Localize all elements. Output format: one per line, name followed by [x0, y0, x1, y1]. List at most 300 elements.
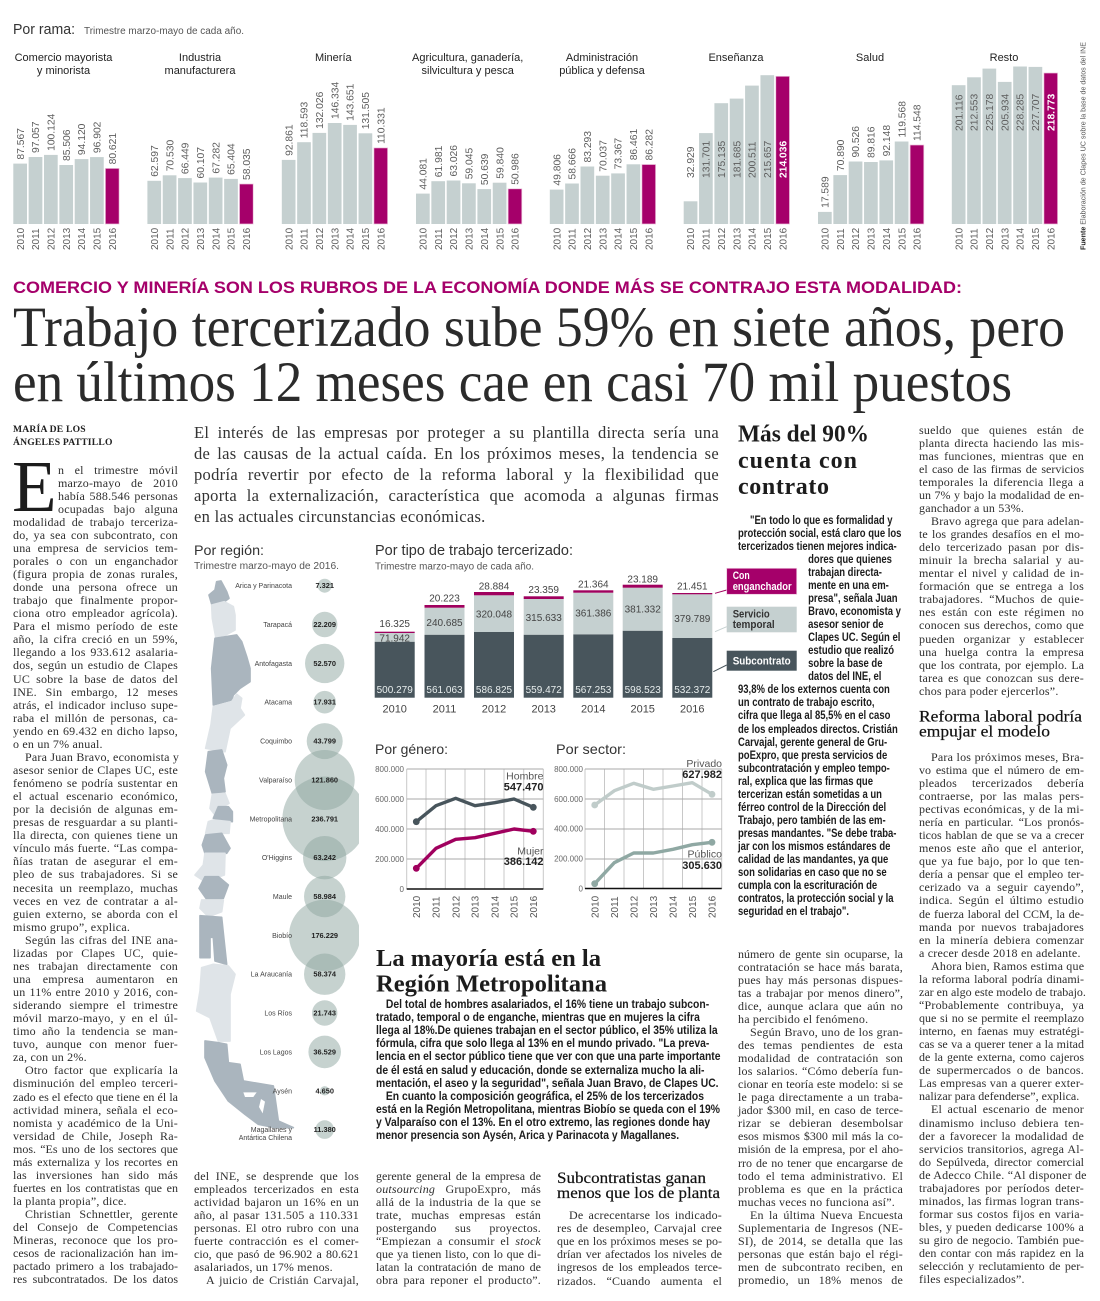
text: bold contract column: ral, explica que las firmas que [738, 776, 873, 788]
map: Chile by region [195, 581, 293, 1128]
bar chart: agricultura: 59.045 [465, 148, 476, 179]
text: column 1: lla directa, con quienes tiene un [13, 828, 178, 842]
text: column 1: pleo de sus trabajadores. Si se [13, 867, 178, 881]
text: column 6 bottom: en la minería debiera comenzar [919, 933, 1084, 947]
region labels and values: Los Lagos [260, 1049, 292, 1056]
text: column 6 bottom: manda por nuevos trabajadores [919, 920, 1084, 934]
text: bold contract column: Carvajal, gerente general de Gru- [738, 737, 887, 749]
stacked bar chart: tipo de trabajo: 598.523 [625, 685, 661, 696]
bar chart: industria manufacturera: 2012 [181, 227, 192, 250]
deck paragraph: aporta la externalización, característica que acomoda a algunas firmas [194, 486, 719, 504]
text: column 5: En la última Nueva Encuesta [750, 1208, 903, 1222]
text: column 6 bottom: de la gente externa, como cajeros [919, 1050, 1084, 1064]
bar chart: resto [952, 52, 1058, 250]
bar chart: industria manufacturera: 2010 [150, 227, 161, 250]
text: column 6 bottom: Ahora bien, Ramos estima que [931, 959, 1084, 973]
text: column 4: rizados. “Cuando aumenta el [557, 1274, 722, 1288]
bar chart: administración pública y defensa: pública y defensa [559, 65, 646, 77]
region labels and values: 58.374 [313, 970, 337, 979]
bar chart: administración pública y defensa: 2010 [552, 227, 563, 250]
region labels and values: Maule [273, 894, 292, 901]
heading: por tipo [375, 543, 573, 572]
text: column 1: Christian Schnettler, gerente [25, 1207, 178, 1221]
bar chart: industria manufacturera: 2011 [165, 228, 176, 250]
text: column 5: misión de la empresa, por el aho- [738, 1142, 903, 1156]
subheading: subcontratistas [557, 1170, 720, 1202]
heading: por tipo: Por tipo de trabajo tercerizado: [375, 543, 573, 559]
text: column 1: del Consejo de Competencias [13, 1220, 178, 1234]
legend: con enganchador: Con [733, 570, 750, 582]
bar chart: minería: 118.593 [300, 101, 311, 138]
text: column 6 bottom: a crecer desde 2018 en adelante. [919, 946, 1081, 960]
text: column 3: que ya tienen listo, con lo que di- [376, 1247, 541, 1261]
text: bold metropolitana lead: y Valparaíso con el 13%. En el otro extremo, las regiones donde hay [376, 1117, 710, 1129]
line chart: por género: 2014 [490, 895, 501, 918]
deck paragraph: de las causas de la actual caída. En los próximos meses, la tendencia se [194, 444, 719, 462]
heading: la mayoría está en la región metropolitana [376, 946, 607, 998]
text: column 6 bottom: Para los próximos meses, Bra- [931, 750, 1084, 764]
bar chart: comercio mayorista y minorista: y minorista [37, 65, 91, 77]
line chart: por género [375, 741, 544, 918]
bar chart: agricultura: Agricultura, ganadería, [412, 52, 523, 64]
text: column 3: trate, muchas empresas están [376, 1208, 541, 1222]
region labels and values: Magallanes y [251, 1127, 292, 1134]
bar chart: minería: 2014 [346, 227, 357, 250]
line chart: por sector: Privado [686, 758, 722, 770]
region labels and values: 7.321 [315, 581, 334, 590]
bar chart: enseñanza: 2014 [748, 227, 759, 250]
heading: la mayoría está en la región metropolitana: La mayoría está en la [376, 946, 601, 972]
bar chart: comercio mayorista y minorista: 2012 [47, 227, 58, 250]
stacked bar chart: tipo de trabajo: 567.253 [575, 685, 612, 696]
text: column 6 bottom: bles, y pueden dedicarse 100% a [919, 1220, 1084, 1234]
legend: con enganchador [715, 568, 797, 594]
text: column 1: móvil marzo-mayo, y en el úl- [13, 1011, 178, 1025]
region labels and values: 121.860 [311, 776, 338, 784]
text: bold metropolitana lead: lencia en el sector público tiene que ver con que una parte importante [376, 1051, 721, 1063]
line chart: por sector: 2010 [590, 895, 601, 918]
line chart: por sector: 2013 [649, 895, 660, 918]
bar chart: industria manufacturera: 60.107 [196, 147, 207, 178]
bar chart: minería: 2015 [361, 227, 372, 250]
text: column 1: asesor senior de Clapes UC, este [13, 763, 178, 777]
region labels and values: 43.799 [313, 737, 336, 746]
text: column 6 bottom: trabajadores por períodos deter- [919, 1181, 1084, 1195]
text: bold contract column: trabajan directa- [808, 567, 882, 579]
text: column 6 top: chos para poder ejercerlos”. [919, 684, 1059, 698]
text: column 3: “Empiezan a consumir el stock [376, 1234, 541, 1248]
stacked bar chart: tipo de trabajo: 379.789 [674, 614, 711, 625]
byline [13, 424, 113, 448]
text: bold contract column: protección social, está claro que los [738, 528, 901, 540]
bubbles: regional totals [282, 579, 367, 1139]
bar chart: comercio mayorista y minorista [13, 52, 119, 250]
region labels and values: Biobío [272, 933, 292, 940]
text: column 1: necesita un reemplazo, muchas [13, 880, 178, 894]
text: column 1: yendo en 69.432 en dicho lapso, [13, 724, 178, 738]
line chart: por sector: 2014 [669, 895, 680, 918]
region labels and values: 176.229 [311, 931, 338, 940]
deck paragraph: en las actuales circunstancias económicas. [194, 506, 486, 526]
line chart: por sector: 627.982 [682, 769, 722, 781]
text: column 5: SI), de 2014, se detalla que las [738, 1234, 903, 1248]
heading: por rama: Por rama: [13, 21, 75, 38]
text: bold contract column: seguridad en el trabajo". [738, 906, 849, 918]
subheading: reforma laboral: Reforma laboral podría [919, 708, 1082, 726]
text: column 1: nes trabajan directamente con [13, 959, 178, 973]
text: column 1: atrás, el indicador incluso supe- [13, 698, 178, 712]
text: bold metropolitana lead: llega al 18%.De quienes trabajan en el sector público, el 35% utiliza la [376, 1025, 718, 1037]
region labels and values: 4.650 [315, 1086, 334, 1095]
stacked bar chart: tipo de trabajo [375, 574, 712, 716]
bar chart: administración pública y defensa: 2014 [614, 227, 625, 250]
text: column 1: lizadas por Clapes UC, quie- [13, 946, 178, 960]
bar chart: salud: 17.589 [820, 176, 832, 208]
bar chart: comercio mayorista y minorista: 97.057 [31, 121, 42, 153]
heading: más del 90% [738, 422, 869, 500]
bar chart: minería: 2016 [376, 227, 387, 250]
text: column 5: dice, aunque aclara que aún no [738, 999, 903, 1013]
text: bold metropolitana lead: tratado, temporal o de enganche, mientras que en mujeres la cifra [376, 1012, 700, 1024]
text: column 1: marzo-mayo de 2010 [58, 476, 178, 490]
region labels and values: Metropolitana [250, 816, 292, 823]
bar chart: administración pública y defensa: 86.282 [644, 129, 655, 160]
byline: MARÍA DE LOS [13, 424, 86, 435]
heading: más del 90%: Más del 90% [738, 422, 869, 448]
subheading: reforma laboral [919, 708, 1082, 740]
text: column 2: cio, que pasó de 96.902 a 80.621 [194, 1247, 359, 1261]
text: column 5: esos mismos $300 mil más la co- [738, 1129, 903, 1143]
text: bold contract column: de los empleados directos. Cristián [738, 724, 898, 736]
bar chart: enseñanza: 2015 [763, 227, 774, 250]
legend: servicio temporal: Servicio [733, 608, 770, 620]
line chart: por sector: 305.630 [682, 860, 722, 872]
bar chart: agricultura [412, 52, 523, 250]
text: column 6 bottom: la reforma laboral podría dinami- [919, 972, 1084, 986]
region labels and values: 58.984 [313, 892, 337, 901]
text: column 4: De acrecentarse los indicado- [569, 1208, 722, 1222]
text: bold contract column: Trabajo, pero también de las em- [738, 815, 886, 827]
heading: por región [194, 542, 339, 572]
heading: más del 90%: cuenta con [738, 448, 857, 474]
bar chart: enseñanza: Enseñanza [708, 52, 764, 64]
text: column 6 top: ganchador a un 53%. [919, 501, 1024, 515]
bar chart: enseñanza: 131.701 [702, 141, 713, 178]
bar chart: administración pública y defensa [550, 52, 656, 250]
text: column 2: empleados tercerizados en esta [194, 1182, 359, 1196]
text: column 5: tas a trabajar por menos dinero”, [738, 986, 903, 1000]
bar chart: resto: 2010 [954, 227, 965, 250]
region labels and values [235, 581, 338, 1142]
stacked bar chart: tipo de trabajo: 2010 [382, 704, 407, 716]
text: column 6 bottom: selección y reclutamiento de per- [919, 1259, 1084, 1273]
line chart: por sector: 200.000 [554, 854, 584, 864]
stacked bar chart: tipo de trabajo: 21.451 [677, 581, 708, 592]
text: bold contract column [738, 514, 901, 918]
bar chart: industria manufacturera: 2013 [196, 227, 207, 250]
bar chart: enseñanza: 2010 [686, 227, 697, 250]
text: column 6 bottom: indica. Según el último estudio [919, 893, 1084, 907]
bar chart: industria manufacturera: 2014 [211, 227, 222, 250]
legend: subcontrato [713, 651, 797, 672]
bar chart: administración pública y defensa: 58.666 [568, 148, 579, 180]
text: column 1: o en un 7% anual. [13, 737, 103, 751]
line chart: por género: Hombre [506, 770, 544, 782]
text: bold contract column: Bravo, economista y [808, 606, 901, 618]
bar chart: comercio mayorista y minorista: Comercio mayorista [15, 52, 113, 64]
region labels and values: Antártica Chilena [239, 1135, 292, 1142]
stacked bar chart: tipo de trabajo: 71.942 [379, 633, 410, 644]
text: bold contract column: tercerizados tienen mejores indica- [738, 541, 897, 553]
bar chart: resto: 228.285 [1016, 94, 1027, 131]
text: column 5: jador $300 mil, en caso de terce- [738, 1103, 903, 1117]
text: column 5: contratación se hace más barata, [738, 960, 903, 974]
bar chart: enseñanza: 214.036 [778, 141, 789, 178]
bar chart: industria manufacturera: manufacturera [165, 65, 236, 77]
text: column 6 bottom: nería en particular. “Los pronós- [919, 815, 1084, 829]
region labels and values: 17.931 [313, 698, 336, 707]
heading: por rama [13, 21, 244, 38]
text: column 5: Suplementaria de Ingresos (NE- [738, 1221, 903, 1235]
line chart: por género: 2016 [529, 895, 540, 918]
text: bold contract column: asesor senior de [808, 619, 884, 631]
text: column 1: veces en vez de contratar a al- [13, 894, 178, 908]
text: column 6 top: sueldo que quienes están de [919, 422, 1084, 436]
bar chart: administración pública y defensa: 70.037 [598, 140, 609, 172]
text: column 5: problema es que en la práctica [738, 1182, 903, 1196]
heading: más del 90%: contrato [738, 474, 829, 500]
text: column 1: mos. “Es uno de los sectores que [13, 1142, 178, 1156]
region labels and values: O'Higgins [262, 855, 292, 862]
text: column 1: do, ya sea con subcontrato, con [13, 528, 178, 542]
text: column 2: A juicio de Cristián Carvajal, [206, 1273, 359, 1287]
text: column 6 bottom: dinamismo incluso debiera ten- [919, 1116, 1084, 1130]
text: bold contract column: mente en una em- [808, 580, 889, 592]
text: bold contract column: cifra que llega al 85,5% en el caso [738, 710, 890, 722]
text: column 6 bottom: de fuerza laboral del CCM, la de- [919, 907, 1084, 921]
text: column 6 bottom [919, 750, 1087, 1286]
deck paragraph: podría revertir por efecto de la reforma laboral y la flexibilidad que [194, 464, 719, 484]
bar chart: comercio mayorista y minorista: 2015 [93, 227, 104, 250]
text: bold contract column: calidad de las mandantes, ya que [738, 854, 888, 866]
heading: por región: Por región: [194, 542, 264, 558]
text: column 1: año, la cifra creció en un 59%, [13, 632, 178, 646]
heading: por región: Trimestre marzo-mayo de 2016. [194, 561, 339, 572]
text: column 1: modalidad de trabajo terceriza- [13, 515, 178, 529]
region labels and values: Arica y Parinacota [235, 583, 292, 590]
bar chart: salud: 2012 [851, 227, 862, 250]
text: column 5: des temas pendientes de esta [738, 1038, 903, 1052]
text: column 1: Para Juan Bravo, economista y [25, 750, 179, 764]
stacked bar chart: tipo de trabajo: 23.359 [528, 585, 559, 596]
text: column 6 bottom: servicios transitorios, agrega Al- [919, 1142, 1084, 1156]
text: column 5: ha percibido el fenómeno. [738, 1012, 868, 1026]
bar chart: agricultura: 2010 [418, 227, 430, 250]
bar chart: agricultura: silvicultura y pesca [422, 65, 515, 77]
stacked bar chart: tipo de trabajo: 2013 [531, 704, 556, 716]
line chart: por género: 2013 [471, 895, 482, 918]
bar chart: minería: 110.331 [376, 107, 387, 144]
text: column 1: ciona otro empleador agrícola). [13, 606, 178, 620]
text: column 3: obra para reponer el producto”. [376, 1273, 541, 1287]
text: bold contract column: jar con los mismos estándares de [738, 841, 890, 853]
text: column 6 bottom: ticos hablan de que se va a crecer [919, 828, 1084, 842]
text: column 1: llegando a los 933.612 asalaria- [13, 645, 178, 659]
text: column 1: n el trimestre móvil [58, 462, 178, 476]
legend: subcontrato: Subcontrato [733, 656, 791, 668]
stacked bar chart: tipo de trabajo: 381.332 [625, 605, 661, 616]
bar chart: industria manufacturera: 62.597 [150, 145, 161, 177]
legend: con enganchador: enganchador [733, 581, 792, 593]
text: column 5: men de subcontrato reciben, en [738, 1260, 903, 1274]
text: column 5: personas que están bajo el régi- [738, 1247, 903, 1261]
stacked bar chart: tipo de trabajo: 240.685 [426, 618, 463, 629]
text: column 6 top: minuir la brecha salarial y au- [919, 553, 1084, 567]
stacked bar chart: tipo de trabajo: 2014 [581, 704, 606, 716]
text: bold contract column: tercerizan están sometidas a un [738, 789, 882, 801]
text: column 1: más externaliza y los recortes en [13, 1155, 178, 1169]
text: bold contract column: Clapes UC. Según el [808, 632, 900, 644]
text: bold metropolitana lead: En cuanto la composición geográfica, el 25% de los tercerizados [386, 1091, 704, 1103]
line chart: por género: 600.000 [375, 795, 405, 804]
text: column 1: res subcontratados. De los datos [13, 1272, 178, 1286]
stacked bar chart: tipo de trabajo: 2012 [482, 704, 506, 716]
text: column 3: gerente general de la empresa de [376, 1168, 541, 1182]
text: column 1: una empresa aumentaron en [13, 972, 178, 986]
text: bold contract column: poExpro, que presta servicios de [738, 750, 887, 762]
line chart: por sector [554, 741, 722, 918]
bar chart: industria manufacturera: Industria [179, 52, 222, 64]
line chart: por género: 800.000 [375, 765, 405, 774]
bar chart: administración pública y defensa: 2013 [598, 227, 609, 250]
bar chart: enseñanza: 2011 [702, 228, 713, 250]
text: column 5: todo el tema administrativo. El [738, 1169, 903, 1183]
bar chart: agricultura: 59.840 [495, 147, 506, 179]
line chart: por género: 2010 [412, 895, 423, 918]
text: column 6 bottom: zar en algo este modelo de trabajo. [919, 985, 1086, 999]
text: column 3 [376, 1168, 541, 1287]
text: column 4: res de desempleo, Carvajal cree [557, 1221, 722, 1235]
line chart: por sector: Público [688, 848, 722, 860]
text: column 6 bottom: contraerse, por las malas pers- [919, 789, 1084, 803]
text: column 6 top: una huelga contra la empresa [919, 645, 1084, 659]
bar chart: enseñanza: 2016 [778, 227, 789, 250]
line chart: por sector: 2011 [610, 896, 621, 918]
text: column 5: pues hay más personas dispues- [738, 973, 903, 987]
text: column 6 bottom: El actual escenario de menor [931, 1102, 1084, 1116]
text: column 1: Mineras, reconoce que los pro- [13, 1233, 178, 1247]
text: column 1: za, con un 2%. [13, 1050, 87, 1064]
bar chart: comercio mayorista y minorista: 80.621 [108, 133, 119, 164]
text: column 6 bottom: pleados tercerizados debería [919, 776, 1084, 790]
region labels and values: Tarapacá [263, 622, 292, 629]
text: column 1: presas de resguardar a su planti- [13, 815, 178, 829]
stacked bar chart: tipo de trabajo: 532.372 [674, 685, 711, 696]
line chart: por sector: 400.000 [554, 824, 584, 834]
text: column 1: zado es el efecto que tiene en él la [13, 1090, 178, 1104]
line chart: por género: 2012 [451, 895, 462, 918]
line chart: por género: Mujer [517, 846, 544, 858]
text: column 1: Otro factor que explicaría la [25, 1063, 178, 1077]
bar chart: resto: 2012 [985, 227, 996, 250]
text: column 6 bottom: minados, las firmas logran trans- [919, 1194, 1084, 1208]
text: bold contract column: 93,8% de los externos cuenta con [738, 684, 890, 696]
stacked bar chart: tipo de trabajo: 586.825 [476, 685, 513, 696]
text: column 1: ñías tratan de asegurar el em- [13, 854, 178, 868]
line chart: por género: 386.142 [504, 856, 544, 868]
text: column 6 bottom: interno, en faenas muy estratégi- [919, 1024, 1084, 1038]
bar chart: minería: 2010 [284, 227, 295, 250]
text: column 5: los salarios. “Cómo debería fun- [738, 1064, 903, 1078]
text: column 1: INE. Sin embargo, 12 meses [13, 685, 178, 699]
text: bold contract column: contratos, la protección social y la [738, 893, 894, 905]
text: column 6 top: trabajadores. “Muchos de quie- [919, 592, 1084, 606]
bar chart: resto: 2013 [1000, 227, 1011, 250]
legend: servicio temporal: temporal [733, 619, 775, 631]
line chart: por género: Por género: [375, 741, 448, 757]
line chart: por género: 400.000 [375, 825, 405, 834]
text: bold metropolitana lead: está en la Región Metropolitana, mientras Biobío se queda con el 19% [376, 1104, 720, 1116]
bar chart: enseñanza: 181.685 [732, 141, 743, 178]
heading: por tipo: Trimestre marzo-mayo de cada año. [375, 562, 534, 572]
text: column 6 bottom: do Sepúlveda, director comercial [919, 1155, 1084, 1169]
legend: servicio temporal [715, 607, 797, 632]
text: column 1: la planta propia”, dice. [13, 1194, 127, 1208]
heading: la mayoría está en la región metropolitana: Región Metropolitana [376, 972, 607, 998]
bar chart: agricultura: 2011 [434, 228, 445, 250]
bar chart: comercio mayorista y minorista: 96.902 [93, 121, 104, 153]
text: column 6 top: planta directa haciendo las mis- [919, 436, 1084, 450]
text: column 2 [194, 1168, 359, 1287]
bar chart: industria manufacturera: 2016 [242, 227, 253, 250]
text: column 6 bottom: pectivas económicas, y de la mi- [919, 802, 1084, 816]
line chart: por género: 2011 [432, 896, 443, 918]
bar chart: comercio mayorista y minorista: 2016 [108, 227, 119, 250]
stacked bar chart: tipo de trabajo: 561.063 [426, 685, 463, 696]
bar chart: minería: 143.651 [346, 83, 357, 121]
text: column 2: personas. El otro rubro con una [194, 1221, 359, 1235]
text: column 1: raba el millón de personas, ca- [13, 711, 178, 725]
bar chart: industria manufacturera: 66.449 [181, 142, 192, 174]
text: column 1: por la decisión de algunas em- [13, 802, 178, 816]
stacked bar chart: tipo de trabajo: 361.386 [575, 608, 612, 619]
text: column 6 top: pueden organizar y establecer [919, 632, 1084, 646]
bar chart: resto: 2014 [1016, 227, 1027, 250]
bar chart: salud: 2010 [820, 227, 832, 250]
text: column 1: Según las cifras del INE ana- [25, 933, 178, 947]
text: column 1: siderando siempre el trimestre [13, 998, 178, 1012]
bar chart: resto: 205.934 [1000, 94, 1011, 131]
text: bold metropolitana lead: de él está en salud y educación, donde se externaliza mucho la ali- [376, 1064, 704, 1076]
line chart: por sector: 2015 [688, 895, 699, 918]
main title: en últimos 12 meses cae en casi 70 mil puestos [13, 351, 1012, 414]
text: column 3: latan la contratación de mano de [376, 1260, 541, 1274]
bar chart: salud: 114.548 [913, 104, 924, 141]
text: column 1: versidad de Chile, Joseph Ra- [13, 1129, 178, 1143]
bar chart: resto: 201.116 [954, 94, 965, 131]
text: column 5 [738, 946, 903, 1287]
bar chart: salud: 2011 [836, 228, 847, 250]
text: bold contract column: datos del INE, el [808, 671, 881, 683]
stacked bar chart: tipo de trabajo: 559.472 [526, 685, 562, 696]
text: column 2: fuerte contracción es el comer- [194, 1234, 359, 1248]
text: column 1: (figura propia de zonas rurales, [13, 567, 178, 581]
bar chart: administración pública y defensa: 73.367 [614, 138, 625, 169]
text: column 5: Según Bravo, uno de los gran- [750, 1025, 903, 1039]
bar chart: salud: 119.568 [897, 101, 908, 138]
bar chart: agricultura: 44.081 [418, 158, 430, 190]
text: column 3: allá de la industria de la que se [376, 1195, 541, 1209]
